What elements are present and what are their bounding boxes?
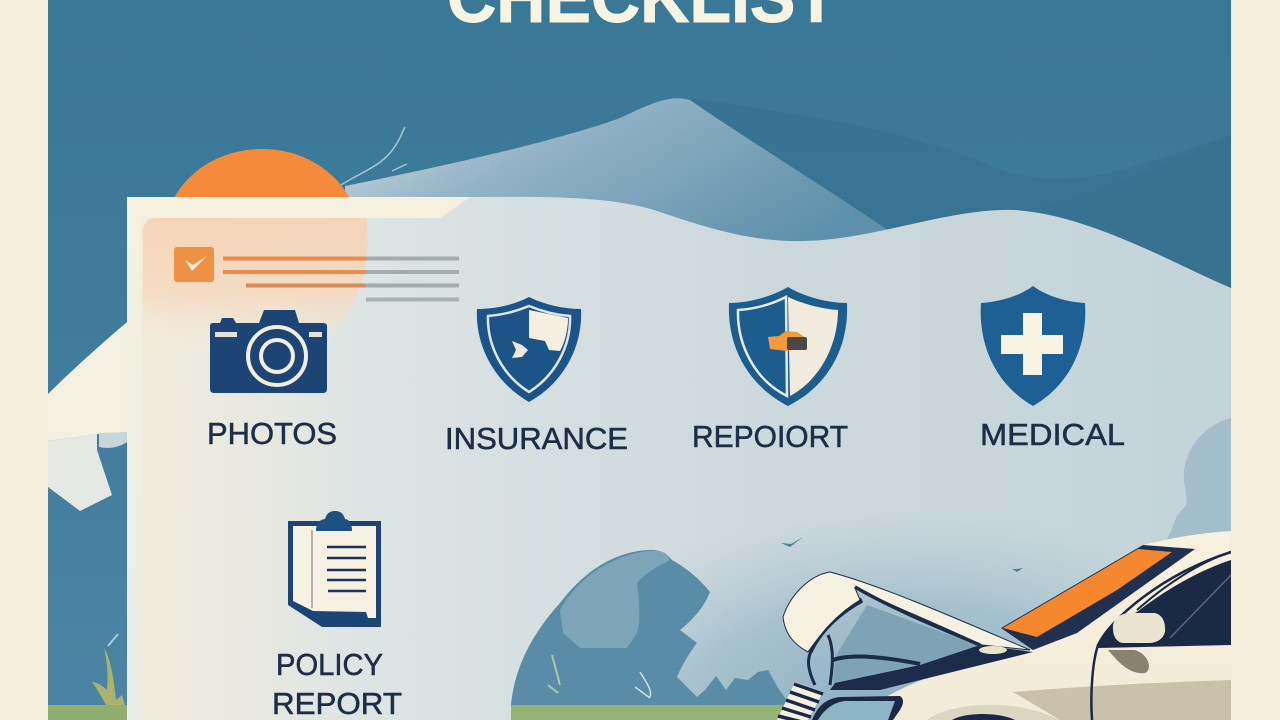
background mountains: [345, 98, 1231, 290]
icon: camera: [210, 310, 327, 393]
translucent sun overlay: [143, 218, 367, 358]
dark hill silhouette: [511, 550, 790, 705]
mirror shadow: [1108, 650, 1149, 673]
raised hood: [783, 572, 1030, 652]
icon: clipboard: [288, 511, 381, 627]
label: policy: POLICY: [276, 647, 383, 682]
label: insurance: INSURANCE: [445, 421, 628, 456]
card edge strip: [127, 197, 470, 720]
lower body shade: [1013, 680, 1231, 720]
label: report lower: REPORT: [272, 686, 402, 720]
label: report: REPOIORT: [692, 419, 848, 454]
icon: report shield: [729, 287, 847, 406]
engine bay: [833, 605, 980, 684]
checklist lines: [223, 258, 459, 300]
orange sun: [169, 149, 355, 209]
ground strip: [511, 705, 783, 720]
left torn paper shape: [48, 322, 127, 511]
checklist header: [174, 247, 459, 300]
panel: checklist card: [127, 197, 1231, 720]
label: photos: PHOTOS: [207, 416, 337, 451]
car body: [860, 531, 1231, 720]
wheel arch: [927, 705, 1060, 720]
windshield orange: [1003, 549, 1172, 637]
hood hinge light: [979, 646, 1007, 654]
left grass: [48, 634, 127, 720]
side window: [1098, 560, 1231, 648]
icon: medical shield: [981, 286, 1085, 406]
door line: [1091, 552, 1231, 720]
grille: [777, 682, 823, 720]
birds: [781, 537, 1023, 572]
icon: insurance shield: [477, 297, 581, 402]
windshield dark frame: [1001, 545, 1195, 650]
headlight: [812, 696, 903, 720]
checkbox icon: [174, 247, 214, 282]
bird and wind strokes: [341, 127, 407, 185]
illustration: damaged car: [777, 531, 1231, 720]
mirror: [1113, 613, 1165, 643]
distant hills right: [1166, 418, 1231, 540]
label: medical: MEDICAL: [980, 417, 1125, 452]
